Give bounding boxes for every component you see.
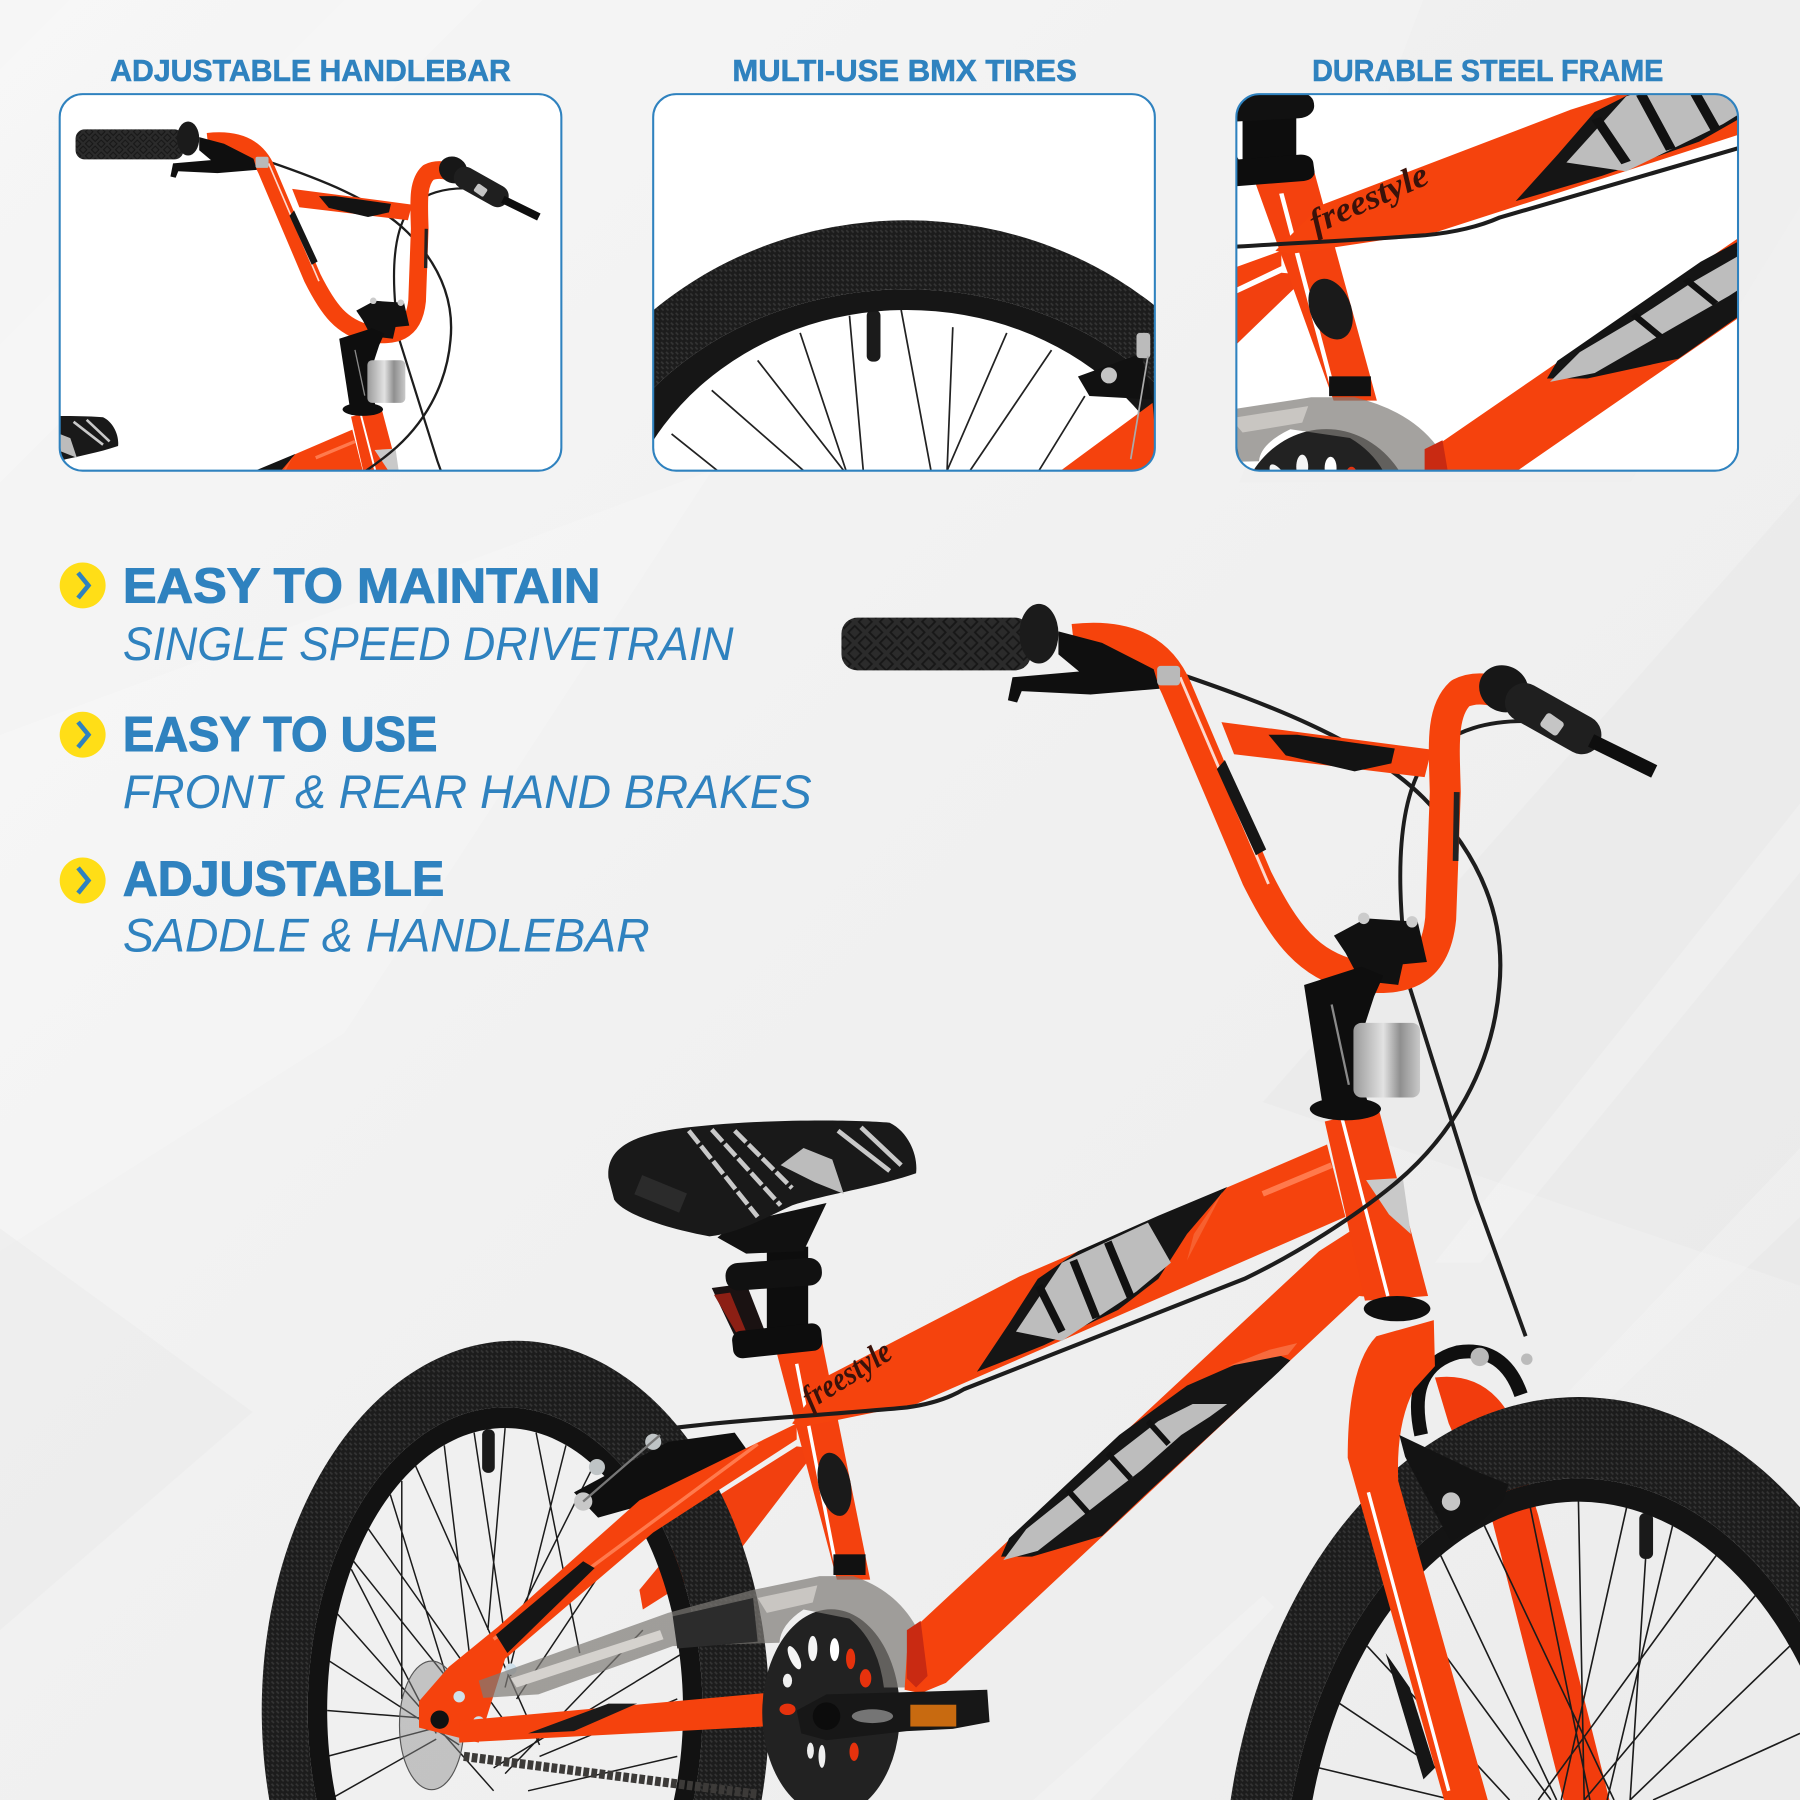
down tube graphic xyxy=(1001,1343,1297,1560)
top tube decal text: freestyle xyxy=(795,1333,899,1416)
head tube lower ring xyxy=(1364,1296,1430,1321)
bottom bracket reflector wedge xyxy=(907,1621,928,1688)
far fork blade xyxy=(1435,1377,1609,1800)
chain guard xyxy=(479,1576,916,1698)
front wheel valve xyxy=(1639,1513,1653,1559)
zoomed frame view: freestyle xyxy=(1303,155,1434,241)
seat tube xyxy=(777,1341,870,1580)
panel border xyxy=(60,94,561,471)
feature description: SINGLE SPEED DRIVETRAIN xyxy=(123,617,734,670)
top tube graphic xyxy=(977,1165,1332,1372)
feature: easy to use xyxy=(60,708,812,818)
pedal xyxy=(797,1690,990,1740)
top tube xyxy=(792,1145,1345,1427)
saddle xyxy=(608,1121,916,1236)
panel border xyxy=(653,94,1155,471)
rear brake xyxy=(574,1433,746,1518)
left grip xyxy=(841,604,1058,670)
rear upper seat stay behind tire xyxy=(639,1446,817,1609)
feature: easy to maintain xyxy=(60,560,734,670)
feature heading: ADJUSTABLE xyxy=(123,852,444,906)
panel: multi-use BMX tires xyxy=(652,60,1156,472)
stem and clamp xyxy=(1304,913,1427,1120)
left brake lever xyxy=(1008,631,1180,703)
chainring xyxy=(762,1609,900,1800)
zoomed tire view xyxy=(654,220,1154,470)
front brake caliper xyxy=(1418,1348,1533,1435)
feature description: FRONT & REAR HAND BRAKES xyxy=(123,765,812,818)
head tube xyxy=(1325,1109,1428,1301)
panel: adjustable handlebar xyxy=(58,60,562,472)
panel heading: ADJUSTABLE HANDLEBAR xyxy=(110,54,511,88)
front reflector xyxy=(1353,1023,1420,1097)
panel border xyxy=(1236,94,1738,471)
feature description: SADDLE & HANDLEBAR xyxy=(123,909,650,962)
feature heading: EASY TO USE xyxy=(123,708,437,762)
zoomed handlebar view xyxy=(60,122,540,470)
fork near blade xyxy=(1348,1320,1488,1800)
seat post and clamp xyxy=(712,1203,827,1359)
front wheel spokes xyxy=(1319,1502,1800,1800)
rear brake and front brake cables xyxy=(673,675,1546,1428)
panel heading: MULTI-USE BMX TIRES xyxy=(732,54,1077,88)
feature: adjustable xyxy=(60,852,650,962)
rear wheel spokes xyxy=(327,1428,683,1798)
icon: yellow chevron bullet xyxy=(60,858,106,903)
right grip and lever xyxy=(1470,656,1654,771)
icon: yellow chevron bullet xyxy=(60,712,106,758)
front tire xyxy=(1231,1397,1800,1800)
handlebar crossbar xyxy=(1221,722,1432,777)
down tube xyxy=(905,1228,1372,1693)
feature heading: EASY TO MAINTAIN xyxy=(123,560,600,614)
icon: yellow chevron bullet xyxy=(60,562,106,608)
front brake pad bracket xyxy=(1399,1435,1508,1542)
bicycle photo illustration xyxy=(262,604,1800,1800)
panel background xyxy=(1236,94,1738,471)
handlebar tube xyxy=(1073,638,1511,978)
rear tire xyxy=(262,1341,769,1800)
panel background xyxy=(653,94,1155,471)
seat stay and rear dropout xyxy=(419,1423,797,1743)
front rim xyxy=(1291,1478,1800,1800)
panel heading: DURABLE STEEL FRAME xyxy=(1312,54,1663,88)
rear wheel valve xyxy=(482,1429,495,1473)
rear rim xyxy=(308,1407,703,1800)
panel background xyxy=(60,94,561,471)
panel: durable steel frame xyxy=(1235,60,1740,472)
rear chain and sprocket shield xyxy=(399,1661,758,1794)
chain stay xyxy=(459,1693,763,1743)
